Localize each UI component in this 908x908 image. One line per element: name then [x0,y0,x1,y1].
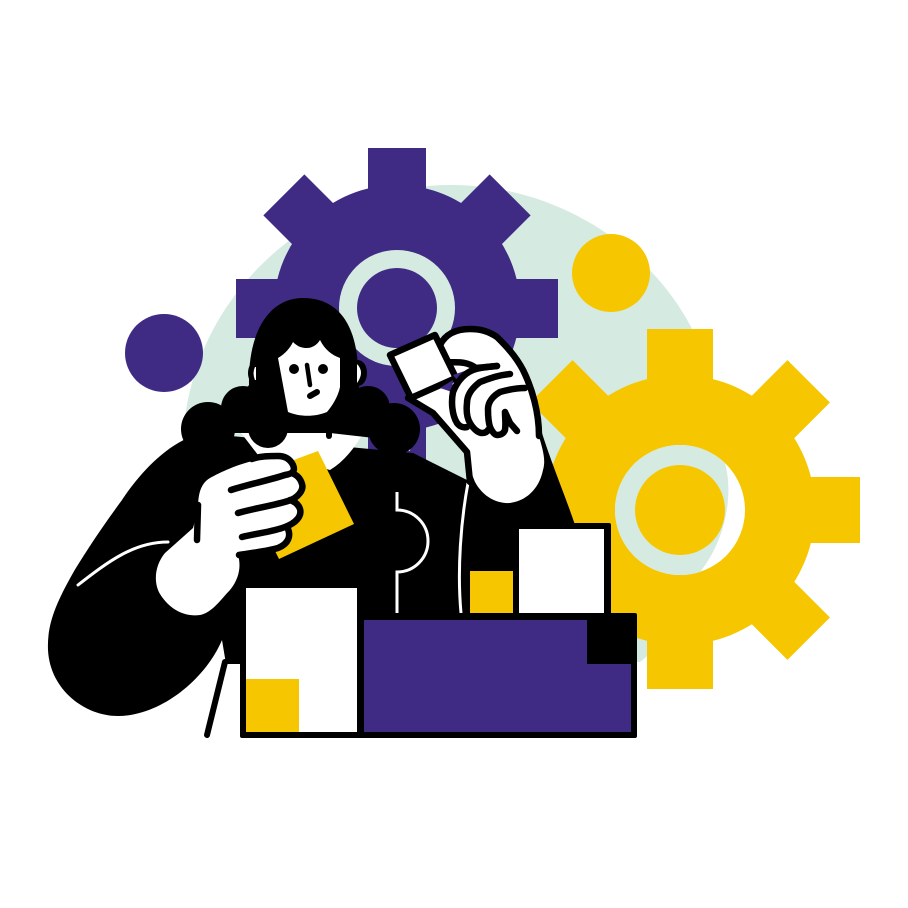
hair [181,298,420,456]
blocks [240,523,637,738]
face [278,340,340,416]
upper box outline [513,523,611,618]
neck opening [235,425,366,470]
mint background blob [183,185,725,662]
eyes [289,364,328,374]
wrist outline [408,398,470,482]
base box outline [240,582,637,738]
finger outlines [197,456,302,555]
neck tag [326,430,332,436]
leg line [207,662,225,735]
small yellow block [470,571,513,613]
white upper block [519,529,604,613]
left hand [156,456,303,615]
purple dot [125,314,203,392]
hand outline [438,329,539,436]
yellow gear [500,329,860,689]
yellow dot [572,234,650,312]
sleeve fold line [78,542,168,585]
purple gear [236,148,558,468]
right hand [390,327,544,503]
purple block [364,620,631,732]
left ear [248,361,264,385]
yellow square [246,679,299,732]
woman figure [48,298,575,735]
arm seam line [459,483,468,613]
right ear [349,360,367,386]
body and sleeves [48,430,575,716]
finger gaps [440,368,473,392]
fingers [452,366,525,435]
nose [307,365,310,385]
puzzle seam line [397,492,428,613]
white card with black border [390,335,456,398]
collar lines [188,432,410,450]
white block [246,588,357,732]
mouth [310,392,317,396]
yellow card in left hand [240,451,354,559]
